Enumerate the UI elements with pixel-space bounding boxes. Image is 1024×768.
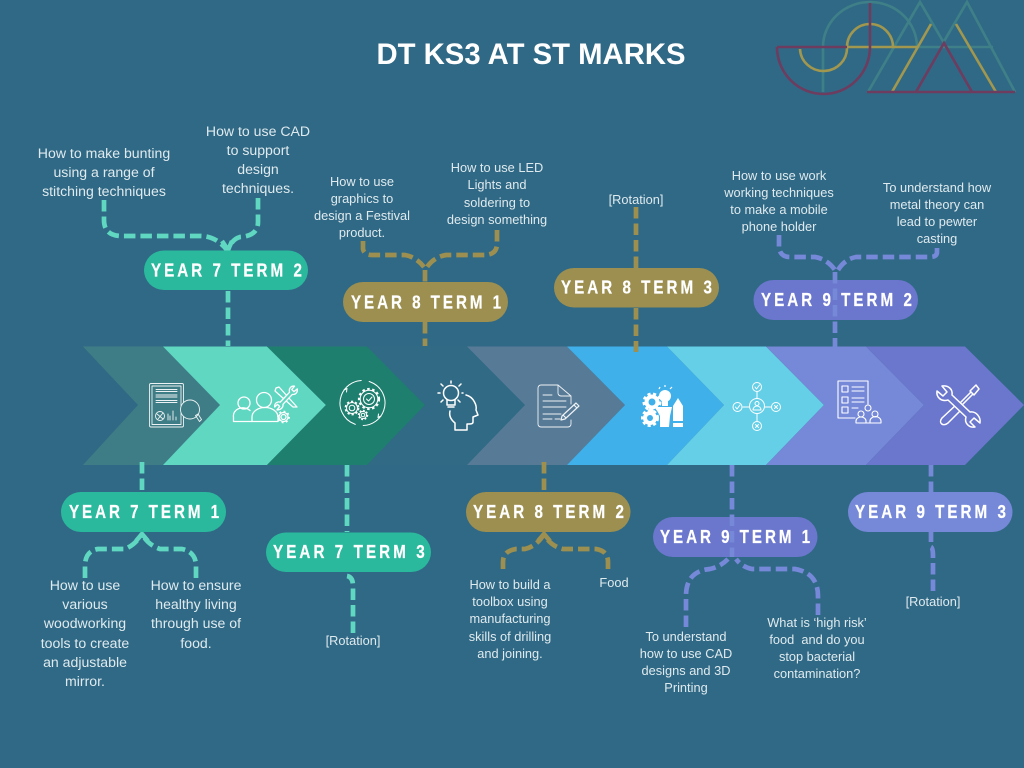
chevron 1 [83,346,220,465]
text: healthy living: through use of [151,615,241,631]
icon: checklist with people [838,381,881,423]
connectors: year 7 term 2 [104,198,258,346]
connectors: year 7 term 3 [347,465,353,633]
pill: year 7 term 3 [266,532,431,572]
text: rotation year 7 term 3: [Rotation] [326,633,380,648]
text: LED: design something [447,212,547,227]
text: phone holder: to make a mobile [730,202,828,217]
pill: year 8 term 3 [554,268,719,308]
text: LED: How to use LED [451,160,543,175]
icon: gears in cycle [334,374,391,432]
text: CAD: design [237,161,279,177]
chevron 9 [866,346,1024,465]
text: CAD: techniques. [222,180,294,196]
pill: year 8 term 2 [466,492,630,532]
text: bunting: How to make bunting [38,145,170,161]
chevron 6 [567,346,724,465]
text: mirror: various [62,596,108,612]
text: graphics: graphics to [331,191,393,206]
pill: year 7 term 2: YEAR 7 TERM 2 [151,260,302,281]
text: mirror: tools to create [41,635,129,651]
text: CAD and 3D printing: To understand [645,629,727,644]
pill: year 9 term 2: YEAR 9 TERM 2 [761,290,912,310]
text: high risk food: food and do you [769,632,865,647]
pill: year 9 term 3 [848,492,1012,532]
text: toolbox: skills of drilling [469,629,551,644]
text: toolbox: and joining. [477,646,543,661]
connectors: year 8 term 2 [503,462,608,569]
connectors: year 9 term 3 [931,465,933,595]
text: bunting: stitching techniques [42,183,166,199]
pill: year 8 term 1: YEAR 8 TERM 1 [351,292,501,313]
text: mirror: an adjustable [43,654,127,670]
text: high risk food: What is ‘high risk’ [767,615,867,630]
text: mirror: How to use [50,577,120,593]
text: toolbox: manufacturing [469,611,551,626]
text: phone holder: How to use work [732,168,827,183]
icon: document with magnifier [150,384,202,427]
icon: person with decision options [733,382,780,430]
pill: year 9 term 1 [653,517,818,557]
text: phone holder: phone holder [742,219,817,234]
pill: year 7 term 2 [144,250,308,290]
chevron 7 [667,346,824,465]
text: high risk food: contamination? [774,666,860,681]
connectors: year 9 term 2 [779,235,937,347]
text: CAD and 3D printing: Printing [664,680,708,695]
text: graphics: product. [339,225,385,240]
icon: crossed wrench and screwdriver [937,385,980,427]
text: phone holder: working techniques [723,185,834,200]
icon: people with tools [233,386,297,422]
connector: year 8 term 3 [634,207,638,352]
pill label: year 9 term 1: YEAR 9 TERM 1 [660,527,810,547]
text: mirror: woodworking [43,615,126,631]
chevron 5 [467,346,625,465]
text: bunting: using a range of [53,164,155,180]
text: CAD and 3D printing: designs and 3D [642,663,730,678]
pill: year 7 term 1 [61,492,226,532]
text: LED: Lights and [467,177,527,192]
chevron 4 [367,346,525,465]
text: food: Food [599,575,629,590]
text: CAD and 3D printing: how to use CAD [640,646,732,661]
text: mirror: mirror. [65,673,105,689]
text: pewter casting: casting [917,231,957,246]
icon: gears, bulb and pencil filled [642,385,683,427]
pill: year 7 term 1: YEAR 7 TERM 1 [69,502,219,522]
chevron 8 [766,346,924,465]
text: healthy living: healthy living [155,596,237,612]
text: LED: soldering to [464,195,530,210]
text: toolbox: toolbox using [472,594,548,609]
pill: year 8 term 3: YEAR 8 TERM 3 [561,277,712,298]
connectors: year 8 term 1 [363,230,497,346]
text: toolbox: How to build a [469,577,551,592]
icon: document with pencil [538,385,579,427]
text: pewter casting: To understand how [883,180,992,195]
decorative logo: arcs and triangles [777,2,1015,94]
text: high risk food: stop bacterial [779,649,855,664]
text: rotation year 9 term 3: [Rotation] [906,594,960,609]
pill: year 8 term 2: YEAR 8 TERM 2 [473,502,624,522]
timeline chevron arrow [83,346,1024,465]
text: healthy living: food. [180,635,212,651]
text: pewter casting: metal theory can [890,197,984,212]
pill: year 8 term 1 [343,282,508,322]
text: graphics: design a Festival [314,208,410,223]
chevron 2 [163,346,326,465]
connectors: year 7 term 1 [85,462,196,578]
text: graphics: How to use [330,174,394,189]
icon: head with lightbulb [438,381,478,430]
pill: year 9 term 3: YEAR 9 TERM 3 [855,502,1006,522]
text: rotation year 8 term 3: [Rotation] [609,192,663,207]
connectors: year 9 term 1 [686,465,818,627]
text: healthy living: How to ensure [151,577,242,593]
chevron 3 [267,346,425,465]
text: CAD: to support [227,142,289,158]
pill: year 7 term 3: YEAR 7 TERM 3 [273,542,425,562]
text: CAD: How to use CAD [206,123,310,139]
title: DT KS3 AT ST MARKS [376,38,686,71]
pill: year 9 term 2 [754,280,918,320]
text: pewter casting: lead to pewter [897,214,978,229]
